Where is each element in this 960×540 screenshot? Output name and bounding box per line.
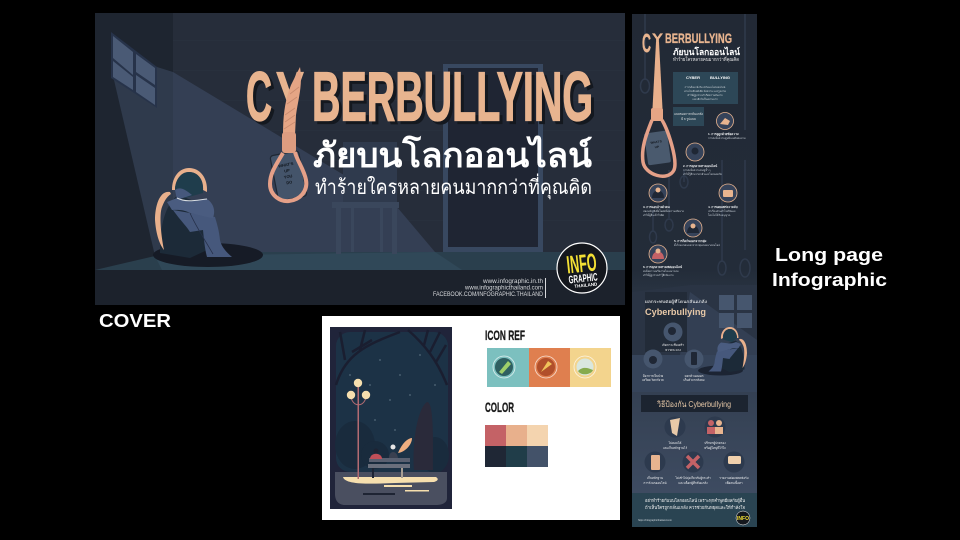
floor xyxy=(95,252,625,270)
section: effects: ผลกระทบต่อผู้ที่โดนกลั่นแกล้ง xyxy=(645,299,707,305)
definition box: ทำให้ผู้ถูกกระทำเกิดความอับอาย xyxy=(687,93,723,97)
prevention icons: การรังแกออนไลน์ xyxy=(644,481,667,485)
footer links: FACEBOOK.COM/INFOGRAPHIC.THAILAND xyxy=(433,292,544,298)
type descriptions: ปลอมบัญชีเพื่อโพสต์ข้อความเสียหาย xyxy=(643,209,684,213)
prevention icons: ไม่ตอบโต้ xyxy=(668,441,681,445)
panel: cover illustration xyxy=(95,13,625,305)
prevention icons: ปรึกษาผู้ปกครอง xyxy=(704,441,726,445)
ground xyxy=(335,472,447,505)
reference poster xyxy=(330,327,452,509)
section: effects: เกิดภาวะซึมเศร้า xyxy=(662,343,684,347)
icon: noose with phone: WHAT'S xyxy=(278,161,294,169)
panel: long page infographic xyxy=(632,14,757,527)
prevention icons: หรือผู้ใหญ่ที่ไว้ใจ xyxy=(704,445,726,450)
big rope and noose with phone: WHAT'S xyxy=(650,139,662,145)
type descriptions: นำเรื่องส่วนตัวไปเปิดเผย xyxy=(708,209,736,213)
bottom band xyxy=(95,270,625,305)
long page title: BERBULLYING xyxy=(665,30,732,46)
definition box: ผ่านโซเชียลมีเดีย ข้อความ และรูปภาพ xyxy=(684,89,726,93)
type descriptions: 2. การคุกคามทางออนไลน์ xyxy=(683,163,718,169)
heading: ICON REF: ICON REF xyxy=(485,327,525,343)
type descriptions: 4. การเผยแพร่ความลับ xyxy=(708,205,738,209)
type descriptions: การส่งข้อความข่มขู่ซ้ำ ๆ xyxy=(683,168,711,173)
type descriptions: 6. การคุกคามทางเพศออนไลน์ xyxy=(643,264,683,270)
icon: noose with phone: YOU xyxy=(283,173,293,180)
long page title xyxy=(642,33,740,62)
section: effects xyxy=(632,285,757,392)
types box xyxy=(673,107,704,126)
logo: infographic thailand: GRAPHIC xyxy=(568,271,598,286)
bench with figures xyxy=(369,458,410,462)
window xyxy=(111,32,157,108)
heading: Thai main title: ภัยบนโลกออนไลน์ xyxy=(313,135,592,175)
prevention icons: และเก็บหลักฐานไว้ xyxy=(663,444,687,450)
icon: noose with phone: DO xyxy=(286,179,293,185)
long page title: ภัยบนโลกออนไลน์ xyxy=(673,46,741,57)
heading: Thai subtitle: ทำร้ายใครหลายคนมากกว่าที่คุณคิด xyxy=(315,173,592,200)
type descriptions: การส่งข้อความดูหมิ่นเหยียดหยาม xyxy=(708,136,746,140)
type descriptions xyxy=(643,131,746,277)
section: effects: เครียด วิตกกังวล xyxy=(642,378,664,382)
background hanging ropes xyxy=(640,14,750,277)
label: Long page Infographic: Infographic xyxy=(772,270,887,290)
footer links: www.infographic.in.th xyxy=(482,279,543,285)
door xyxy=(443,64,543,252)
section: effects: มีอาการเจ็บป่วย xyxy=(643,372,664,378)
title: CYBERBULLYING: C xyxy=(246,58,272,136)
types box: แบบของการกลั่นแกล้ง xyxy=(674,112,703,116)
color palette xyxy=(485,425,548,467)
prevention icons: ไม่เข้าไปยุ่งเกี่ยวกับผู้กระทำ xyxy=(674,476,711,481)
type descriptions: ตั้งใจแยกคนออกจากกลุ่มสนทนาออนไลน์ xyxy=(674,243,720,248)
icon: noose with phone xyxy=(270,67,307,201)
footer links: www.infographicthailand.com xyxy=(464,286,543,292)
section: effects: หวาดระแวง xyxy=(665,348,681,352)
prevention icons: รายงานต่อแพลตฟอร์ม xyxy=(719,476,749,480)
lamp xyxy=(358,382,359,479)
title shadow xyxy=(253,74,594,124)
panel: references xyxy=(322,316,620,520)
type descriptions: ทำให้ผู้อื่นเข้าใจผิด xyxy=(643,213,664,217)
type descriptions: ทำให้รู้สึกหวาดกลัวและไม่ปลอดภัย xyxy=(683,172,722,176)
title shadow: BERBULLYING xyxy=(315,60,596,138)
icon strip xyxy=(487,348,611,387)
title shadow: C xyxy=(249,60,275,138)
prevention icons: และบล็อกผู้ที่กลั่นแกล้ง xyxy=(678,479,708,485)
type descriptions: 3. การแอบอ้างตัวตน xyxy=(643,204,671,209)
chair xyxy=(332,142,399,254)
closing message band: อย่าทำร้ายกันบนโลกออนไลน์ เพราะทุกคำพูดมีผลกับผู้อื่น xyxy=(645,497,745,504)
label: Long page Infographic xyxy=(772,245,887,290)
title: CYBERBULLYING: BERBULLYING xyxy=(312,58,593,136)
title: CYBERBULLYING xyxy=(247,71,591,122)
banner: how to prevent xyxy=(641,395,748,412)
big rope and noose with phone: UP xyxy=(655,145,659,149)
closing message band: https://infographicthailand.com xyxy=(638,519,672,522)
heading: COLOR: COLOR xyxy=(485,399,514,415)
label: Long page Infographic: Long page xyxy=(775,245,883,265)
closing message band: INFO xyxy=(737,516,749,522)
footer links xyxy=(433,279,544,298)
section: effects: เก็บตัวจากสังคม xyxy=(684,376,704,382)
icon: noose with phone: UP xyxy=(284,168,290,174)
section: effects: Cyberbullying xyxy=(645,307,706,317)
prevention icons xyxy=(644,416,749,485)
definition box: BULLYING xyxy=(710,75,730,80)
types box: มี 6 รูปแบบ xyxy=(681,117,696,121)
stars xyxy=(349,354,436,431)
closing message band: ถ้าเห็นใครถูกกลั่นแกล้ง ควรช่วยกันหยุดและให้กำลังใจ xyxy=(645,503,745,511)
type descriptions: โดยไม่ได้รับอนุญาต xyxy=(708,213,731,218)
icon circles: six types xyxy=(649,112,737,263)
logo: infographic thailand: INFO xyxy=(565,249,598,280)
logo: infographic thailand xyxy=(557,243,607,293)
definition box: CYBER xyxy=(686,75,700,80)
type descriptions: ส่งข้อความหรือภาพไม่เหมาะสม xyxy=(643,269,679,273)
big rope and noose with phone xyxy=(643,42,675,176)
logo: infographic thailand: THAILAND xyxy=(574,281,598,289)
definition box: การกลั่นแกล้งรังแกกันบนโลกออนไลน์ xyxy=(685,85,726,89)
section: effects: แยกตัวเองออก xyxy=(685,374,704,378)
prevention icons: เก็บหลักฐาน xyxy=(647,474,663,480)
light beam xyxy=(114,67,173,256)
figure: girl hugging knees xyxy=(153,168,263,267)
type descriptions: ทำให้ผู้ถูกกระทำรู้สึกอับอาย xyxy=(643,273,674,277)
long page title: C xyxy=(642,28,651,58)
label: COVER: COVER xyxy=(99,311,171,331)
prevention icons: เพื่อลบเนื้อหา xyxy=(725,480,743,485)
definition box: และเสียใจเป็นอย่างมาก xyxy=(692,96,718,101)
long page title: ทำร้ายใครหลายคนมากกว่าที่คุณคิด xyxy=(673,56,739,63)
closing message band xyxy=(632,493,757,527)
girl mirrored xyxy=(698,327,747,376)
title: CYBERBULLYING: Y xyxy=(276,58,304,136)
type descriptions: 5. การกีดกันออกจากกลุ่ม xyxy=(674,239,706,244)
definition box xyxy=(673,72,738,104)
long page title: Y xyxy=(652,30,664,46)
banner: how to prevent: วิธีป้องกัน Cyberbullying xyxy=(657,400,731,409)
trees xyxy=(336,330,447,385)
type descriptions: 1. การดูถูกด้วยข้อความ xyxy=(708,131,739,137)
